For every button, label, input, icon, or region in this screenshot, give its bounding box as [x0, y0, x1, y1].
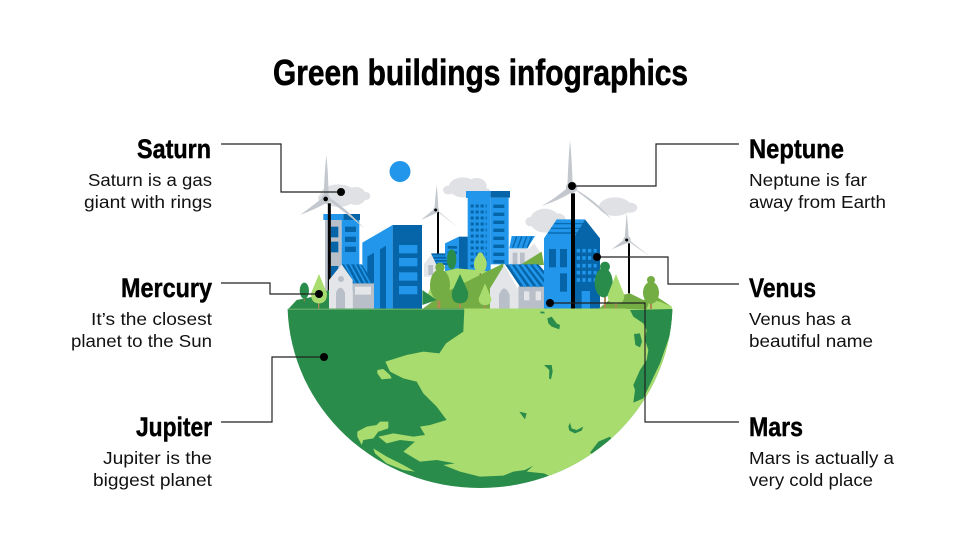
callout: Venus: [593, 253, 873, 351]
cloud behind right building: [525, 209, 566, 233]
globe hemisphere: [288, 309, 672, 488]
building: rear tower: [323, 214, 360, 291]
callout: Jupiter: [93, 353, 328, 490]
turbine: Neptune: [542, 140, 612, 309]
callout: Mars: [546, 299, 894, 490]
callout: Venus: Venus: [749, 273, 816, 303]
illustration: right part of the city: [422, 140, 672, 309]
building mid blue: [445, 237, 469, 272]
hills centre: [422, 263, 503, 309]
house rear: [509, 236, 544, 267]
tree light right: [608, 274, 624, 309]
callout: Mercury: Mercury: [121, 273, 212, 303]
tree olive large: [430, 263, 450, 309]
illustration: left part of the city: [288, 155, 490, 309]
tree small dark: [447, 249, 456, 270]
callout: Jupiter: Jupiter is the: [103, 448, 212, 468]
callout: Mars: Mars: [749, 412, 803, 442]
right building: [544, 219, 600, 309]
light green continents: [357, 309, 680, 490]
cloud behind Saturn turbine: [318, 184, 370, 207]
callout: Neptune: away from Earth: [749, 192, 886, 212]
callout: Neptune: Neptune is far: [749, 170, 867, 190]
ground band top edge: [288, 308, 626, 310]
callout: Jupiter: biggest planet: [93, 470, 212, 490]
tree olive right: [643, 276, 659, 309]
callout: Saturn: Saturn is a gas: [88, 170, 212, 190]
turbine: Saturn: [300, 155, 364, 309]
cloud behind right turbine: [599, 197, 637, 216]
callout: Neptune: [568, 134, 886, 212]
house front: [468, 264, 559, 309]
callout: Saturn: Saturn: [137, 134, 211, 164]
tree dark right: [595, 262, 613, 309]
tall tower: [466, 191, 510, 279]
callout: Mars: very cold place: [749, 470, 873, 490]
dark green islands: [519, 309, 673, 457]
tree light left of house: [479, 283, 491, 309]
cloud centre: [443, 177, 490, 197]
callout: Mercury: It’s the closest: [91, 309, 212, 329]
callout: Mercury: [71, 273, 323, 351]
callout: Saturn: giant with rings: [84, 192, 212, 212]
right hills: [598, 293, 672, 309]
turbine: centre: [421, 185, 458, 255]
tree dark triangle: [452, 274, 468, 309]
tree light next to tower: [474, 252, 487, 278]
house small: [424, 253, 448, 277]
turbine: Venus: [612, 213, 650, 293]
icon: sun: [390, 161, 410, 182]
callout: Mercury: planet to the Sun: [71, 331, 212, 351]
house left: [329, 264, 374, 309]
building: large blue block: [362, 225, 422, 309]
hill left: [288, 290, 329, 309]
callout: Venus: beautiful name: [749, 331, 873, 351]
callout: Mars: Mars is actually a: [749, 448, 894, 468]
callout: Saturn: [84, 134, 345, 212]
tree dark: [300, 283, 309, 302]
title: Green buildings infographics: [273, 52, 688, 93]
callout: Jupiter: Jupiter: [136, 412, 212, 442]
callout: Neptune: Neptune: [749, 134, 844, 164]
tree light: [311, 274, 327, 309]
callout: Venus: Venus has a: [749, 309, 851, 329]
